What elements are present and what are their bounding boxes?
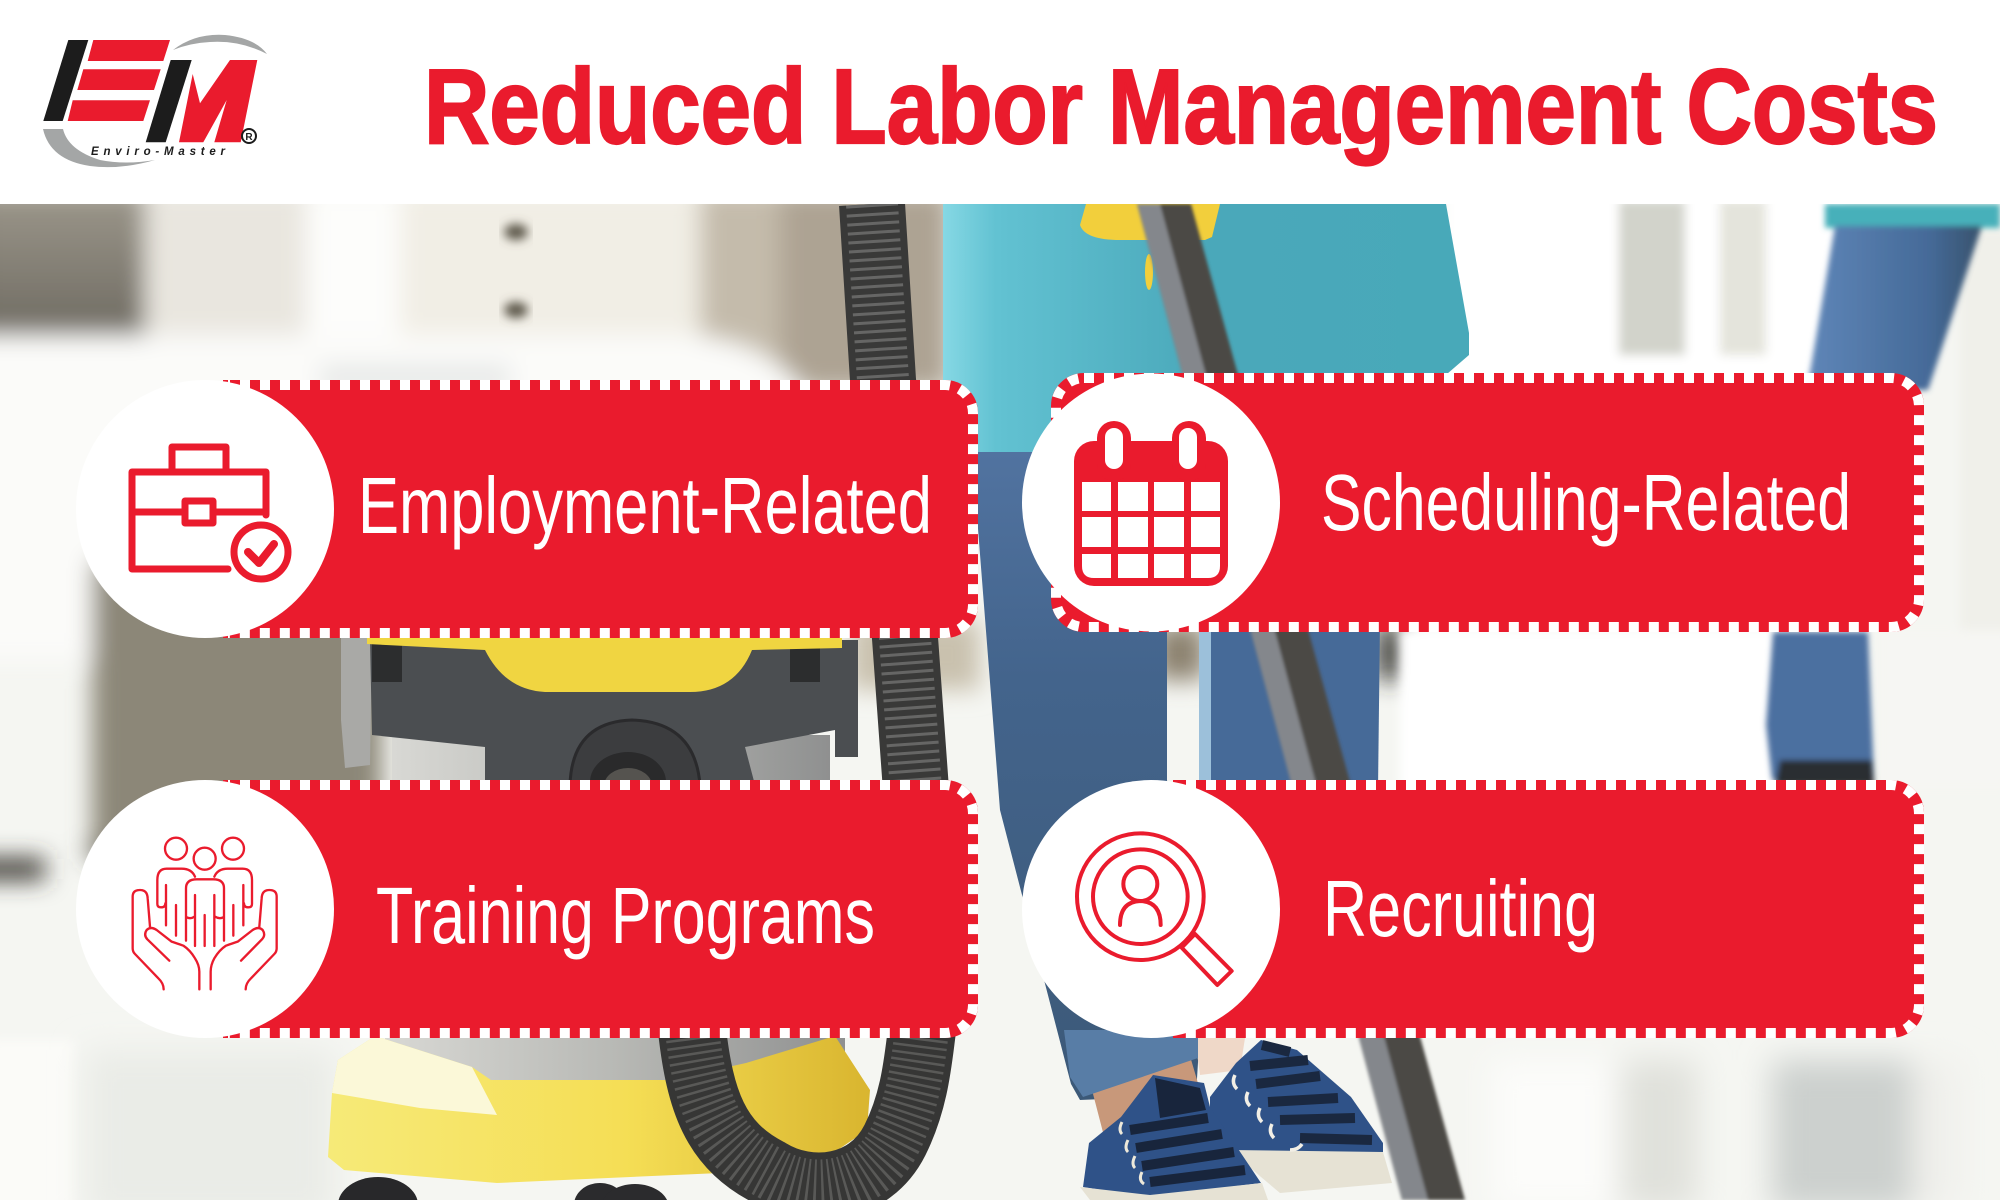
header band: [0, 0, 2000, 204]
cabinet knobs: [504, 224, 528, 318]
jeans: [972, 452, 1199, 1100]
label: training programs: Training Programs: [376, 871, 875, 960]
icon: calendar: [1074, 421, 1228, 586]
header logo: Enviro-Master: [43, 35, 267, 167]
panel: employment-related: [76, 380, 973, 638]
label: scheduling-related: Scheduling-Related: [1321, 458, 1851, 547]
panel: scheduling-related: [1022, 374, 1919, 632]
shoes: [1064, 1030, 1392, 1200]
panel: recruiting: [1022, 780, 1919, 1038]
label: employment-related: Employment-Related: [358, 461, 932, 550]
hose lower: [692, 1030, 922, 1186]
label: recruiting: Recruiting: [1323, 864, 1598, 953]
vacuum upper: [341, 636, 858, 812]
far cleaner: [1766, 204, 2000, 785]
icon: magnifier with person: [1077, 833, 1232, 985]
icon: hands holding people: [133, 838, 277, 989]
glove: [1080, 204, 1220, 240]
hose upper: [872, 204, 916, 790]
header logo: Enviro-Master: Enviro-Master: [91, 146, 226, 158]
pole: [1137, 204, 1465, 1200]
shirt: [943, 204, 1469, 460]
blurred room: [0, 190, 1620, 880]
header logo: Enviro-Master: R: [245, 132, 253, 143]
panel: training programs: [76, 780, 973, 1038]
icon: briefcase with check: [132, 447, 288, 579]
vacuum lower: [328, 1030, 870, 1200]
